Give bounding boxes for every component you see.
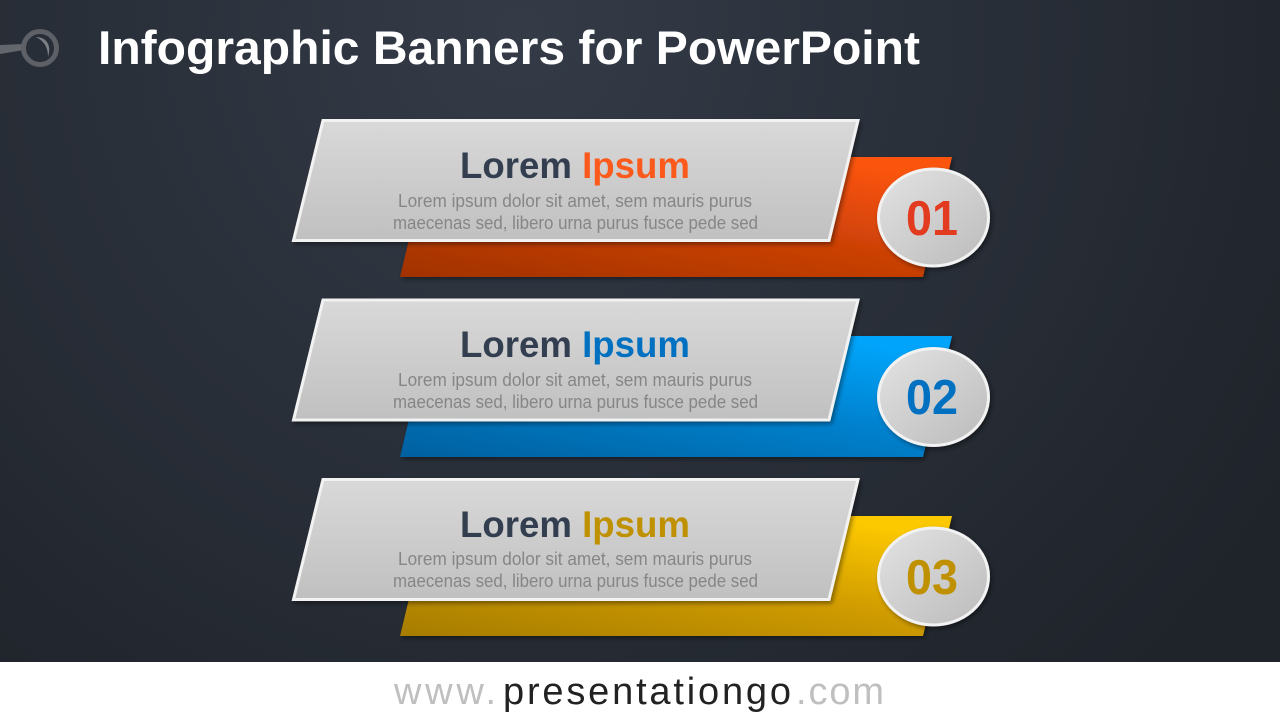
icon: presentation go key logo [0, 32, 56, 64]
footer: website address [393, 671, 884, 713]
yellow ribbon [400, 516, 952, 636]
number badge 01: 01 [906, 192, 958, 246]
footer: website address: .com [796, 671, 884, 713]
footer: website address: www. [393, 671, 496, 713]
heading: banner 03: Lorem Ipsum [460, 504, 690, 545]
panel: banner 02 card [294, 300, 858, 420]
footer: website address: presentationgo [503, 671, 791, 713]
banner 01 [294, 120, 988, 277]
text block: banner 02 line 1: Lorem ipsum dolor sit amet, sem mauris purus [398, 370, 752, 390]
text block: banner 03 line 1: Lorem ipsum dolor sit amet, sem mauris purus [398, 549, 752, 569]
number badge 03: 03 [906, 551, 958, 605]
orange ribbon [400, 157, 952, 277]
number badge 02 [878, 348, 988, 446]
number badge 02: 02 [906, 371, 958, 425]
heading: banner 02: Lorem Ipsum [460, 324, 690, 365]
panel: banner 03 card [294, 480, 858, 600]
banner 03 [294, 480, 988, 636]
text block: banner 01 line 2: maecenas sed, libero urna purus fusce pede sed [393, 213, 758, 233]
number badge 03 [878, 528, 988, 625]
blue ribbon [400, 336, 952, 457]
text block: banner 02 line 2: maecenas sed, libero urna purus fusce pede sed [393, 392, 758, 412]
panel: banner 01 card [294, 120, 858, 240]
banner 02 [294, 300, 988, 457]
heading: banner 01: Lorem Ipsum [460, 145, 690, 186]
text block: banner 03 line 2: maecenas sed, libero urna purus fusce pede sed [393, 571, 758, 591]
number badge 01 [878, 169, 988, 266]
text block: banner 01 line 1: Lorem ipsum dolor sit amet, sem mauris purus [398, 191, 752, 211]
title: Infographic Banners for PowerPoint [98, 21, 920, 74]
